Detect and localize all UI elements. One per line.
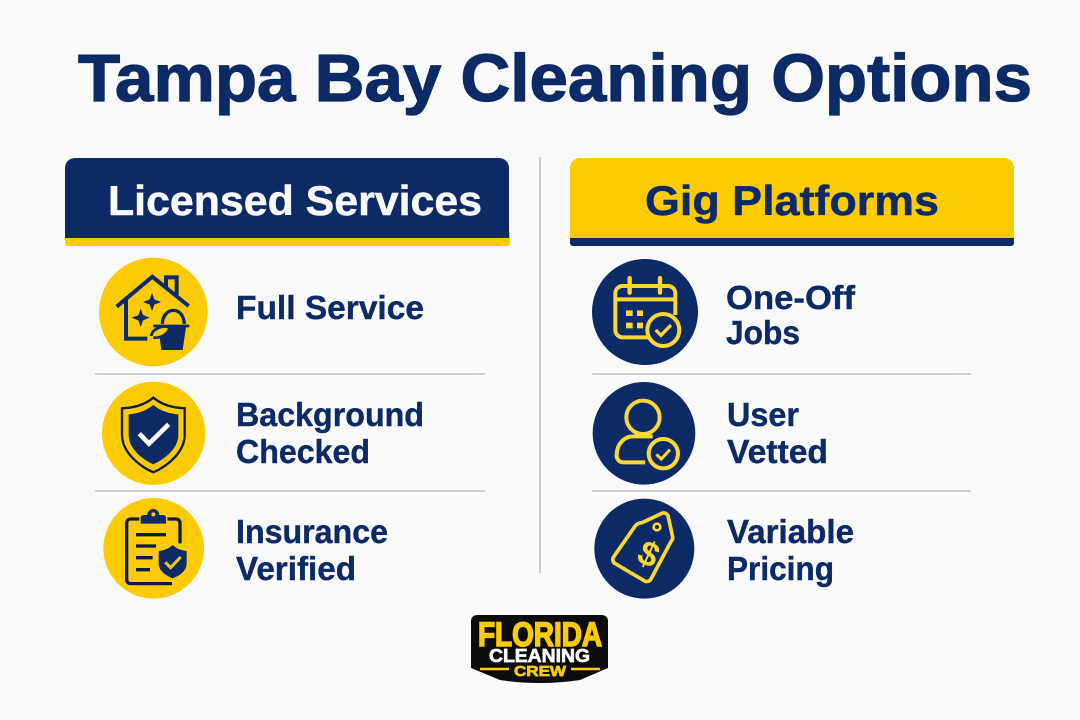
icon: calendar with check: [592, 259, 698, 365]
icon: house with bucket: [99, 258, 208, 366]
panel: gig platforms: [570, 158, 1014, 599]
label: one-off jobs: [726, 279, 856, 351]
logo: florida cleaning crew: CLEANING: [489, 646, 590, 666]
label: variable pricing: Pricing: [727, 550, 834, 587]
label: insurance verified: Insurance: [236, 513, 388, 550]
icon: shield with check: [102, 382, 205, 485]
panel: licensed services: [65, 158, 510, 599]
licensed services header: Licensed Services: [108, 177, 482, 224]
label: background checked: Background: [236, 396, 424, 433]
label: background checked: Checked: [236, 433, 370, 470]
gig platforms header: Gig Platforms: [645, 177, 939, 224]
label: insurance verified: Verified: [236, 550, 356, 587]
label: user vetted: Vetted: [727, 433, 828, 470]
label: user vetted: User: [727, 396, 799, 433]
gig platforms header: [570, 158, 1014, 246]
icon: price tag with dollar: $: [632, 533, 665, 576]
icon: clipboard with shield: [103, 498, 204, 599]
label: insurance verified: [236, 513, 388, 587]
label: variable pricing: Variable: [727, 513, 854, 550]
icon: price tag with dollar: [594, 499, 694, 599]
label: variable pricing: [727, 513, 854, 587]
logo: florida cleaning crew: CREW: [514, 663, 567, 680]
logo: florida cleaning crew: FLORIDA: [478, 616, 602, 654]
label: user vetted: [727, 396, 828, 470]
title: Tampa Bay Cleaning Options: [78, 41, 1032, 116]
label: full service: Full Service: [236, 289, 424, 326]
logo: florida cleaning crew: [471, 615, 608, 683]
label: one-off jobs: One-Off: [726, 279, 856, 316]
label: one-off jobs: Jobs: [726, 314, 800, 351]
icon: user with check: [593, 382, 695, 485]
licensed services header: [65, 158, 510, 246]
label: background checked: [236, 396, 424, 470]
